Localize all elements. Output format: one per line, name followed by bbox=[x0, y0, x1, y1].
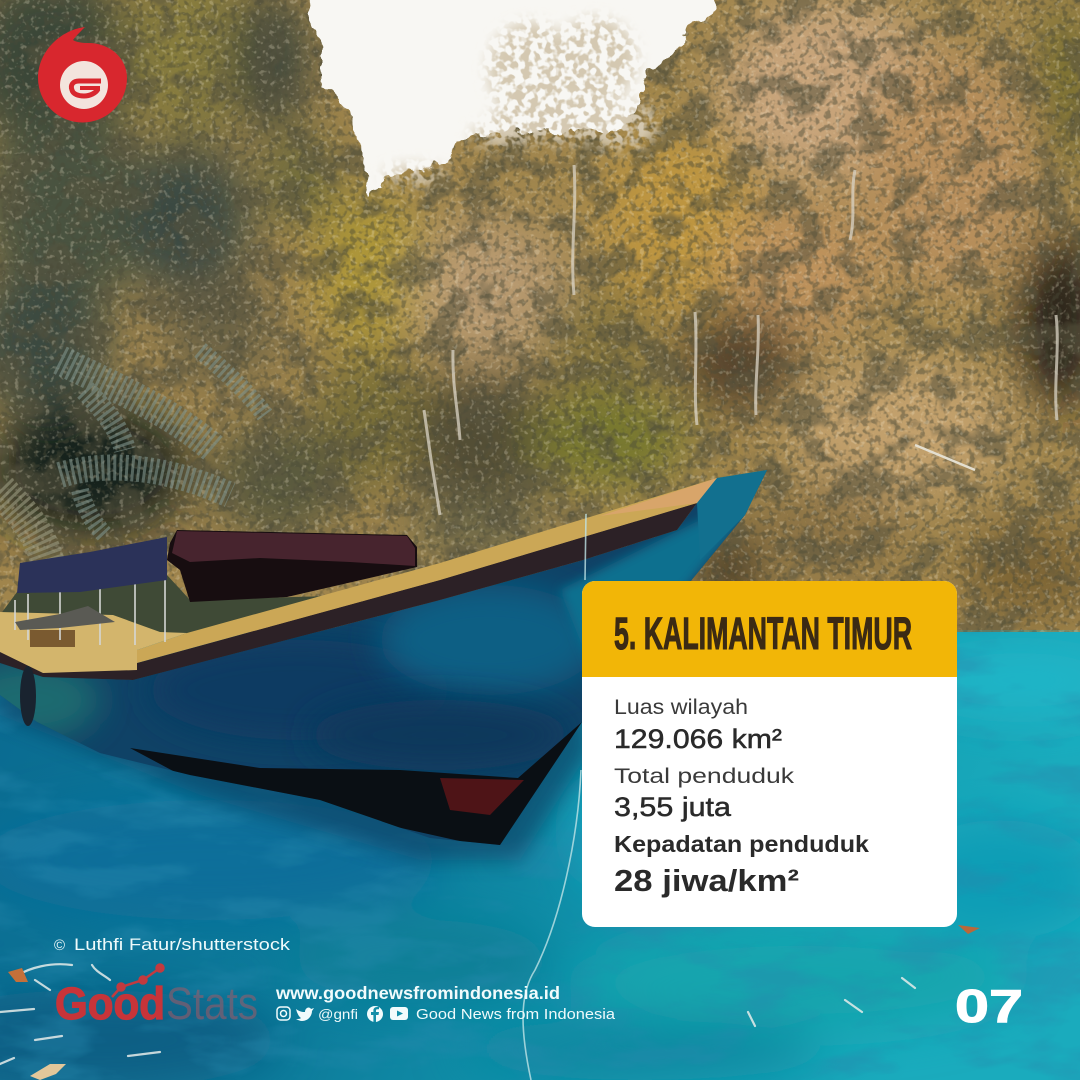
yellow rail bbox=[137, 470, 767, 663]
footer links bbox=[275, 983, 616, 1023]
wordmark: Stats: Stats bbox=[166, 978, 258, 1029]
trend line bbox=[112, 964, 164, 997]
icon: twitter bbox=[296, 1008, 314, 1021]
fern fronds bbox=[0, 350, 265, 570]
sky: pale tree bbox=[383, 18, 660, 185]
foliage behind boat bbox=[0, 575, 330, 636]
canopy maroon bbox=[167, 530, 417, 602]
rope bbox=[523, 514, 586, 1080]
wordmark: Good: Good bbox=[55, 978, 165, 1029]
water bbox=[0, 632, 1080, 1080]
website: www.goodnewsfromindonesia.id bbox=[275, 983, 560, 1003]
photo credit bbox=[54, 935, 291, 954]
icon: facebook bbox=[367, 1006, 383, 1022]
label: area: Luas wilayah bbox=[614, 696, 748, 719]
icon: copyright: © bbox=[54, 937, 65, 954]
tree trunks bbox=[424, 165, 1057, 515]
bow inner bbox=[697, 470, 767, 560]
deck bench bbox=[30, 630, 75, 647]
hull shadow keel bbox=[130, 722, 582, 850]
page number: 07 bbox=[955, 980, 1023, 1032]
sky bbox=[296, 0, 716, 197]
floating leaves bbox=[0, 964, 915, 1064]
dark gunwale stripe bbox=[0, 503, 697, 680]
deck cargo bbox=[15, 606, 115, 630]
value: area: 129.066 km² bbox=[614, 724, 782, 754]
value: population: 3,55 juta bbox=[614, 792, 732, 822]
mooring buoy bbox=[20, 666, 36, 726]
red keel patch bbox=[440, 778, 524, 815]
hull reflection bbox=[0, 690, 590, 860]
icon: youtube bbox=[390, 1007, 408, 1020]
hull bbox=[0, 460, 780, 860]
panel: province card bbox=[582, 581, 957, 927]
channel name: Good News from Indonesia bbox=[416, 1006, 616, 1023]
logo: GNFI bbox=[38, 27, 127, 122]
credit text: Luthfi Fatur/shutterstock bbox=[74, 935, 291, 954]
logo: GoodStats bbox=[55, 964, 258, 1029]
icon: instagram bbox=[277, 1007, 290, 1020]
card header bbox=[582, 581, 957, 677]
value: density: 28 jiwa/km² bbox=[614, 863, 799, 898]
canopy navy bbox=[17, 537, 167, 593]
photo background: forest and sky bbox=[0, 0, 1080, 640]
deck bbox=[0, 612, 187, 673]
label: density: Kepadatan penduduk bbox=[614, 831, 869, 857]
social handle: @gnfi bbox=[318, 1006, 358, 1022]
canopy support poles bbox=[15, 580, 165, 645]
boat bbox=[0, 460, 780, 860]
label: population: Total penduduk bbox=[614, 765, 795, 788]
card body bbox=[582, 581, 957, 927]
